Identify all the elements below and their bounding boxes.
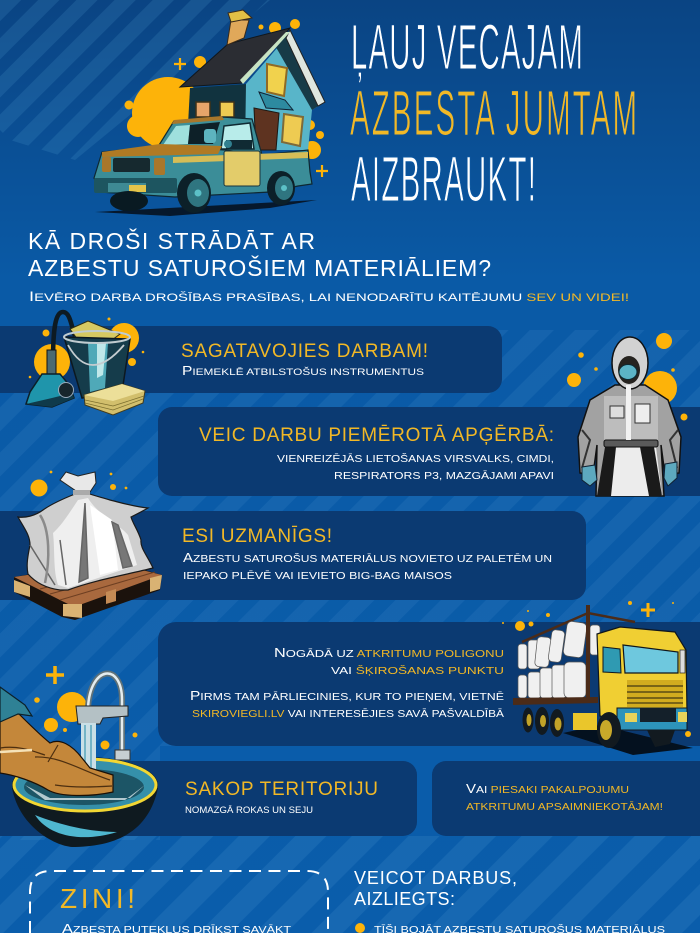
panel: clothing xyxy=(158,407,700,496)
title: AIZBRAUKT! xyxy=(351,143,536,215)
illustration: worker in protective suit xyxy=(567,333,688,496)
panel: prepare: PIEMEKLĒ ATBILSTOŠUS INSTRUMENTUS xyxy=(182,364,424,378)
panel: order service: ATKRITUMU APSAIMNIEKOTĀJAM! xyxy=(466,801,663,813)
heading xyxy=(28,227,491,281)
panel: order service: VAI PIESAKI PAKALPOJUMU xyxy=(466,782,629,796)
panel: clothing: VEIC DARBU PIEMĒROTĀ APĢĒRBĀ: xyxy=(199,425,554,446)
title xyxy=(350,11,637,215)
panel: transport xyxy=(158,622,700,746)
illustration: washing hands over bowl xyxy=(0,666,158,847)
panel: transport: N OGĀDĀ UZ ATKRITUMU POLIGONU xyxy=(274,646,504,660)
panel: transport: PIRMS TAM PĀRLIECINIES, KUR TO PIEŅEM, VIETNĒ xyxy=(190,689,504,703)
forbidden list xyxy=(354,868,665,933)
panel: prepare xyxy=(0,326,502,393)
title: ĻAUJ VECAJAM xyxy=(351,11,583,83)
forbidden list: VEICOT DARBUS, xyxy=(354,868,517,888)
illustration: bag on pallet xyxy=(14,471,162,620)
intro text: IEVĒRO DARBA DROŠĪBAS PRASĪBAS, LAI NENODARĪTU KAITĒJUMU SEV UN VIDEI! xyxy=(29,289,629,304)
panel: clothing: VIENREIZĒJĀS LIETOŠANAS VIRSVALKS, CIMDI, xyxy=(277,452,554,465)
illustration: vacuum and bucket xyxy=(26,312,145,415)
panel: transport: SKIROVIEGLI.LV VAI INTERESĒJIES SAVĀ PAŠVALDĪBĀ xyxy=(192,707,504,720)
panel: transport: VAI ŠĶIROŠANAS PUNKTU xyxy=(331,664,504,677)
panel: be careful: ESI UZMANĪGS! xyxy=(182,526,332,547)
panel: be careful xyxy=(0,511,586,600)
panel: be careful: IEPAKO PLĒVĒ VAI IEVIETO BIG-BAG MAISOS xyxy=(183,570,452,582)
panel: clean up: SAKOP TERITORIJU xyxy=(185,779,378,800)
title: AZBESTA JUMTAM xyxy=(350,77,637,149)
heading: KĀ DROŠI STRĀDĀT AR xyxy=(28,227,315,254)
panel: clothing: RESPIRATORS P3, MAZGĀJAMI APAVI xyxy=(334,470,554,482)
panel: prepare: SAGATAVOJIES DARBAM! xyxy=(181,341,428,362)
callout: know xyxy=(30,871,328,933)
panel: order service xyxy=(432,761,700,836)
heading: AZBESTU SATUROŠIEM MATERIĀLIEM? xyxy=(28,254,491,281)
panel: clean up xyxy=(0,761,417,836)
illustration: truck with bags xyxy=(502,601,693,755)
illustration: house on pickup truck xyxy=(94,10,328,216)
panel: be careful: AZBESTU SATUROŠUS MATERIĀLUS NOVIETO UZ PALETĒM UN xyxy=(183,551,552,565)
callout: know: ZINI! xyxy=(60,883,135,914)
forbidden list: AIZLIEGTS: xyxy=(354,889,455,909)
panel: clean up: NOMAZGĀ ROKAS UN SEJU xyxy=(185,805,313,815)
